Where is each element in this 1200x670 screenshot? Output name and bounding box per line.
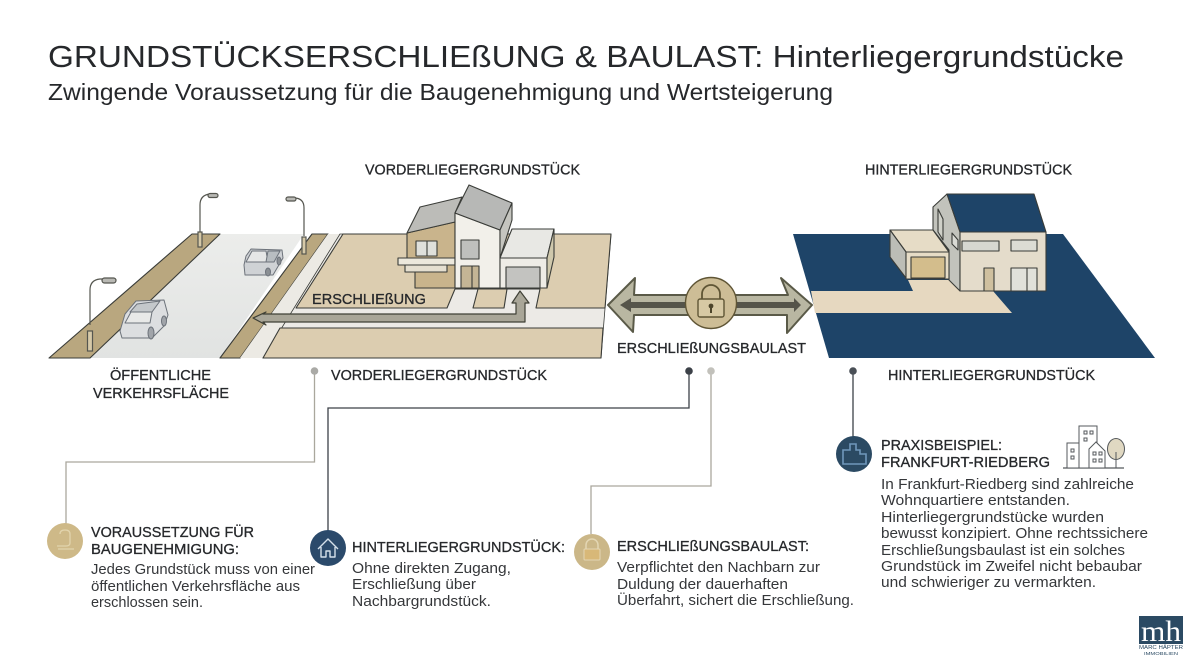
icon: padlock	[686, 278, 736, 328]
panel: practical example: und schwieriger zu vermarkten.	[881, 574, 1096, 591]
icon: house	[310, 530, 346, 566]
panel: practical example: FRANKFURT-RIEDBERG	[881, 454, 1050, 471]
label: access: ERSCHLIEßUNG	[312, 291, 426, 308]
scene labels: VERKEHRSFLÄCHE	[93, 385, 229, 402]
title: GRUNDSTÜCKSERSCHLIEßUNG & BAULAST: Hinterliegergrundstücke	[48, 39, 1124, 74]
panel: building permit: BAUGENEHMIGUNG:	[91, 541, 239, 558]
panel: easement explanation: Duldung der dauerhaften	[617, 576, 788, 593]
logo	[1139, 615, 1183, 656]
panel: practical example	[836, 426, 1148, 591]
logo: IMMOBILIEN	[1144, 651, 1178, 656]
panel: building permit: öffentlichen Verkehrsfläche aus	[91, 578, 300, 595]
panel: rear plot explanation: Erschließung über	[352, 576, 476, 593]
icon: street lamp right	[286, 197, 306, 254]
lock arrow	[608, 278, 812, 333]
icon: document seal	[47, 523, 83, 559]
house: rear	[890, 194, 1046, 291]
public road scene	[49, 194, 340, 358]
panel: rear plot explanation: HINTERLIEGERGRUNDSTÜCK:	[352, 538, 565, 556]
house: front	[398, 185, 554, 288]
panel: practical example: Hinterliegergrundstücke wurden	[881, 509, 1104, 526]
scene labels: HINTERLIEGERGRUNDSTÜCK	[865, 160, 1072, 178]
icon: car front	[120, 300, 168, 339]
icon: street lamp middle	[198, 194, 218, 247]
panel: building permit: Jedes Grundstück muss von einer	[91, 561, 315, 578]
scene labels: ERSCHLIEßUNGSBAULAST	[617, 340, 806, 357]
panel: building permit	[47, 523, 315, 611]
front plot	[253, 185, 611, 358]
panel: practical example: In Frankfurt-Riedberg sind zahlreiche	[881, 476, 1134, 493]
scene labels: HINTERLIEGERGRUNDSTÜCK	[888, 366, 1095, 384]
panel: easement explanation: Verpflichtet den Nachbarn zur	[617, 559, 820, 576]
scene labels: VORDERLIEGERGRUNDSTÜCK	[365, 160, 580, 178]
subtitle: Zwingende Voraussetzung für die Baugenehmigung und Wertsteigerung	[48, 79, 833, 105]
panel: easement explanation: Überfahrt, sichert die Erschließung.	[617, 591, 854, 609]
scene labels	[93, 160, 1095, 402]
panel: rear plot explanation: Ohne direkten Zugang,	[352, 560, 511, 577]
panel: practical example: bewusst konzipiert. Ohne rechtssichere	[881, 525, 1148, 542]
icon: lock	[574, 534, 610, 570]
panel: building permit: erschlossen sein.	[91, 594, 203, 611]
logo: mh	[1141, 615, 1181, 648]
panel: practical example: Grundstück im Zweifel nicht bebaubar	[881, 558, 1142, 575]
icon: city skyline	[1063, 426, 1124, 468]
leader lines	[66, 367, 857, 534]
panel: practical example: Wohnquartiere entstanden.	[881, 492, 1070, 509]
panel: easement explanation: ERSCHLIEßUNGSBAULAST:	[617, 538, 809, 555]
panel: practical example: Erschließungsbaulast ist ein solches	[881, 542, 1125, 559]
icon: street lamp left	[88, 278, 116, 351]
scene labels: ÖFFENTLICHE	[110, 366, 211, 384]
icon: car rear	[244, 249, 283, 276]
rear plot	[793, 194, 1155, 358]
panel: rear plot explanation	[310, 530, 565, 610]
logo: MARC HÄPTER	[1139, 644, 1183, 651]
panel: building permit: VORAUSSETZUNG FÜR	[91, 523, 254, 541]
panel: rear plot explanation: Nachbargrundstück.	[352, 593, 491, 610]
arrow: access path	[253, 291, 529, 325]
scene labels: VORDERLIEGERGRUNDSTÜCK	[331, 366, 547, 384]
panel: practical example: PRAXISBEISPIEL:	[881, 437, 1002, 454]
icon: city badge	[836, 436, 872, 472]
panel: easement explanation	[574, 534, 854, 609]
